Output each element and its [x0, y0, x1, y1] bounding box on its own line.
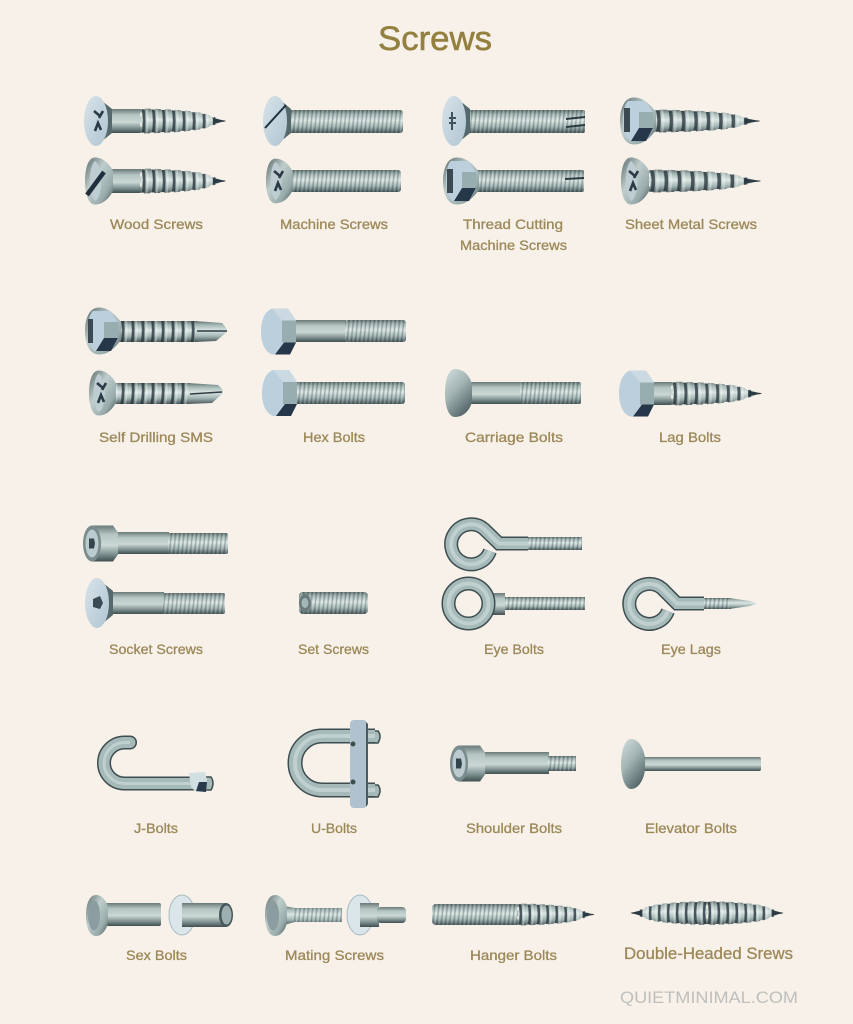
label: Self Drilling SMS: [99, 429, 213, 445]
shoulder bolt: [450, 746, 576, 836]
label: Double-Headed Srews: [624, 944, 793, 963]
group: hex bolts: [261, 308, 406, 445]
label line two: Machine Screws: [460, 237, 567, 253]
machine screw, pan head: [266, 159, 401, 203]
group: self drilling SMS: [85, 308, 227, 445]
sex bolt, male: [86, 895, 161, 936]
socket screw, flat head: [85, 578, 225, 628]
wood screw, flat head: [84, 96, 226, 146]
label: U-Bolts: [311, 820, 357, 836]
wood screw, dome head: [85, 158, 226, 204]
label: Machine Screws: [280, 216, 388, 232]
label: Set Screws: [298, 641, 369, 657]
eye bolt, closed: [448, 584, 585, 624]
label: Eye Lags: [661, 641, 721, 657]
group: thread cutting machine screws: [442, 96, 585, 253]
lag bolt: [619, 370, 762, 445]
sex bolt, female: [169, 895, 233, 935]
set screw: [299, 592, 368, 614]
label: Thread Cutting: [463, 216, 563, 232]
group: set screw: [298, 592, 369, 657]
group: socket screws: [83, 526, 228, 657]
label: Sex Bolts: [126, 947, 187, 963]
socket screw, cap head: [83, 526, 228, 562]
hanger bolt: [432, 904, 594, 963]
hex bolt, full thread: [262, 370, 405, 416]
label: Carriage Bolts: [465, 429, 563, 445]
group: sex bolts: [86, 895, 233, 963]
sheet metal screw, dome head: [621, 158, 761, 204]
thread cutting screw, flat head: [442, 96, 585, 146]
elevator bolt: [621, 739, 761, 836]
group: wood screws: [84, 96, 226, 232]
credit: QUIETMINIMAL.COM: [620, 988, 798, 1007]
mating screw, female: [347, 895, 406, 935]
double-headed screw: [624, 901, 793, 963]
self drilling screw, pan head: [89, 370, 223, 416]
carriage bolt: [445, 369, 581, 445]
label: Eye Bolts: [484, 641, 544, 657]
self drilling screw, hex head: [85, 308, 227, 354]
thread cutting screw, hex head: [443, 158, 584, 204]
group: mating screws: [265, 895, 406, 963]
J-bolt: [104, 742, 213, 836]
machine screw, flat head: [263, 96, 403, 146]
label: Lag Bolts: [659, 429, 721, 445]
label: Sheet Metal Screws: [625, 216, 757, 232]
group: machine screws: [263, 96, 403, 232]
eye lag: [629, 584, 757, 657]
label: Hanger Bolts: [470, 947, 557, 963]
hex bolt, partial thread: [261, 308, 406, 354]
U-bolt: [295, 720, 380, 836]
label: J-Bolts: [134, 820, 178, 836]
label: Hex Bolts: [303, 429, 365, 445]
label: Shoulder Bolts: [466, 820, 562, 836]
sheet metal screw, hex head: [620, 98, 760, 144]
group: sheet metal screws: [620, 98, 761, 232]
label: Elevator Bolts: [645, 820, 737, 836]
label: Mating Screws: [285, 947, 384, 963]
label: Socket Screws: [109, 641, 203, 657]
eye bolt, open: [451, 524, 582, 564]
label: Wood Screws: [110, 216, 203, 232]
group: eye bolts: [448, 524, 585, 657]
mating screw, male: [265, 895, 342, 936]
title: Screws: [378, 20, 492, 58]
